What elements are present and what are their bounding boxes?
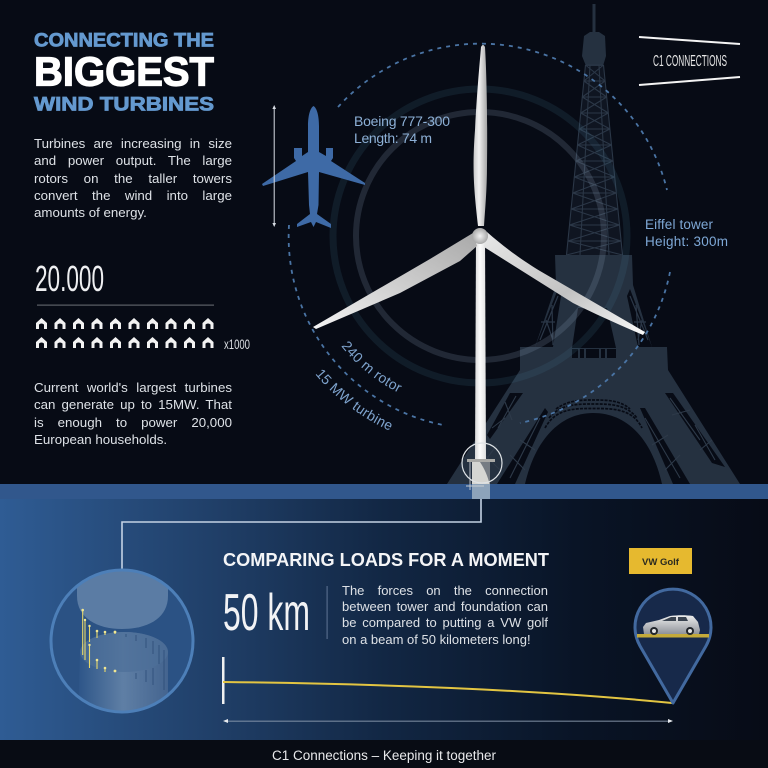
label: Eiffel tower: Eiffel tower <box>645 217 714 232</box>
decorative rotor rings <box>333 89 627 383</box>
text block: capacity <box>34 380 232 447</box>
footer text: C1 Connections – Keeping it together <box>272 748 496 763</box>
text block: forces comparison: be compared to putting a VW golf <box>342 615 548 630</box>
text block: intro: and power output. The large <box>34 153 232 168</box>
text block: intro: Turbines are increasing in size <box>34 136 232 151</box>
text block: capacity: European households. <box>34 432 167 447</box>
title: BIGGEST <box>34 48 214 94</box>
text block: forces comparison: The forces on the connection <box>342 582 548 598</box>
water band <box>0 484 768 499</box>
panel: lower comparison background <box>0 484 768 741</box>
title: WIND TURBINES <box>34 94 214 116</box>
pin with car <box>635 589 711 703</box>
text block: capacity: is enough to power 20,000 <box>34 414 232 430</box>
text block: capacity: Current world's largest turbines <box>34 380 232 394</box>
beam chart: deflection over 50 km <box>222 657 672 704</box>
stat: 20.000: 20.000 <box>35 258 104 299</box>
rotor diameter dashed circle <box>289 44 670 425</box>
divider <box>37 305 214 306</box>
text block: capacity: can generate up to 15MW. That <box>34 397 232 412</box>
label: x1000: x1000 <box>224 336 250 352</box>
icons: households <box>36 318 214 348</box>
text block: intro: convert the wind into large <box>34 188 232 203</box>
arrow: beam length <box>223 719 673 723</box>
label: Eiffel tower: Height: 300m <box>645 234 728 249</box>
illustration: Eiffel tower <box>447 4 740 484</box>
stat: 50 km: 50 km <box>223 584 310 642</box>
highlight circle on tower base <box>462 443 502 483</box>
text block: intro <box>34 136 232 220</box>
arrow: airplane length <box>272 105 276 227</box>
label: 240 m rotor: 240 m rotor <box>342 342 402 392</box>
text block: forces comparison: on a beam of 50 kilometers long! <box>342 632 531 647</box>
title <box>34 30 214 116</box>
footer bar <box>0 740 768 768</box>
text block: intro: rotors on the taller towers <box>34 170 232 186</box>
divider <box>326 586 328 639</box>
label: Boeing 777-300: Length: 74 m <box>354 130 432 146</box>
logo: C1 Connections <box>639 37 740 85</box>
text block: forces comparison: between tower and foundation can <box>342 599 548 614</box>
label: VW Golf <box>629 548 692 574</box>
heading: comparing loads: COMPARING LOADS FOR A MOMENT <box>223 550 549 570</box>
connector line to detail <box>122 499 481 569</box>
detail circle: tower to foundation connection <box>51 560 193 720</box>
label: Boeing 777-300: Boeing 777-300 <box>354 113 450 129</box>
label: VW Golf: VW Golf <box>642 557 680 568</box>
icon: airplane Boeing 777 <box>262 106 365 228</box>
illustration: wind turbine <box>313 45 645 499</box>
text block: intro: amounts of energy. <box>34 205 147 220</box>
label: 15 MW turbine: 15 MW turbine <box>316 370 392 430</box>
text block: forces comparison <box>342 582 548 647</box>
title: CONNECTING THE <box>34 30 214 52</box>
